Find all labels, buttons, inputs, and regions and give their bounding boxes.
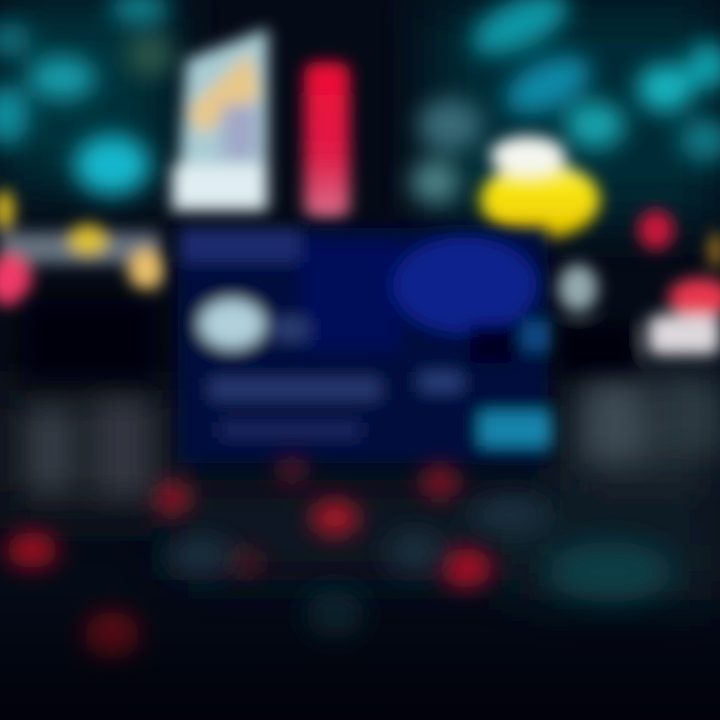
yellow lamp bbox=[480, 136, 600, 238]
lower grey and teal tones bbox=[30, 380, 720, 639]
central blue panel bbox=[178, 228, 552, 463]
cyan lights, upper right bbox=[411, 0, 720, 204]
red vertical sign bbox=[304, 62, 350, 218]
right lights bbox=[558, 210, 720, 375]
dark block, left bbox=[22, 298, 157, 383]
left string lights bbox=[0, 190, 164, 306]
bottom shadow bbox=[0, 590, 720, 720]
lower red lights bbox=[6, 458, 492, 660]
white billboard bbox=[172, 28, 268, 211]
cyan lights, upper left bbox=[0, 0, 174, 195]
